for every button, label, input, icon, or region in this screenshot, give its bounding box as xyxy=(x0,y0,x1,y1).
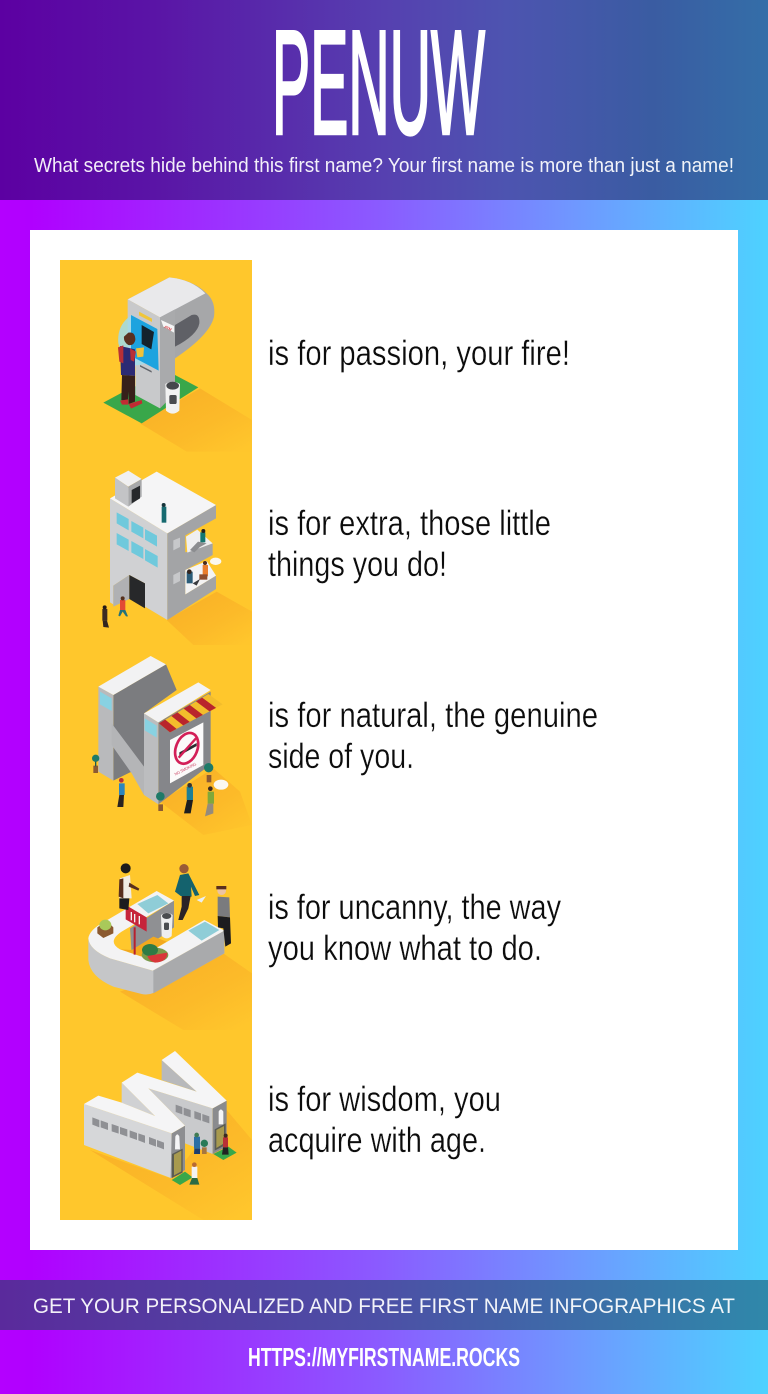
text: N lines: is for natural, the genuine xyxy=(268,696,598,735)
subtitle: What secrets hide behind this first name? Your first name is more than just a name! xyxy=(34,155,734,177)
icon: letter U buffet counter xyxy=(88,863,252,1030)
text: P line: is for passion, your fire! xyxy=(268,334,570,373)
text: N lines xyxy=(268,696,598,776)
text: W lines xyxy=(268,1080,501,1160)
text: W lines: acquire with age. xyxy=(268,1121,486,1160)
text: U lines: is for uncanny, the way xyxy=(268,888,561,927)
text: U lines: you know what to do. xyxy=(268,929,542,968)
footer call to action: GET YOUR PERSONALIZED AND FREE FIRST NAME INFOGRAPHICS AT xyxy=(33,1295,735,1318)
text: E lines xyxy=(268,504,551,584)
label: ATM sign xyxy=(161,320,174,333)
text: N lines: side of you. xyxy=(268,737,414,776)
text: E lines: is for extra, those little xyxy=(268,504,551,543)
label: ATM sign: ATM xyxy=(164,325,172,332)
icon: letter W restroom block xyxy=(84,1051,252,1220)
text: E lines: things you do! xyxy=(268,545,447,584)
text: U lines xyxy=(268,888,561,968)
footer url: HTTPS://MYFIRSTNAME.ROCKS xyxy=(248,1342,520,1372)
yellow illustration column xyxy=(60,260,252,1220)
sign: no smoking xyxy=(170,722,203,783)
icon: letter N storefront xyxy=(92,656,252,835)
white content panel xyxy=(30,230,738,1250)
icon: letter P ATM xyxy=(103,277,252,452)
icon: letter E building xyxy=(102,471,252,645)
footer band xyxy=(0,1280,768,1330)
text: W lines: is for wisdom, you xyxy=(268,1080,501,1119)
header band xyxy=(0,0,768,200)
sign: no smoking: NO SMOKING xyxy=(174,761,197,777)
